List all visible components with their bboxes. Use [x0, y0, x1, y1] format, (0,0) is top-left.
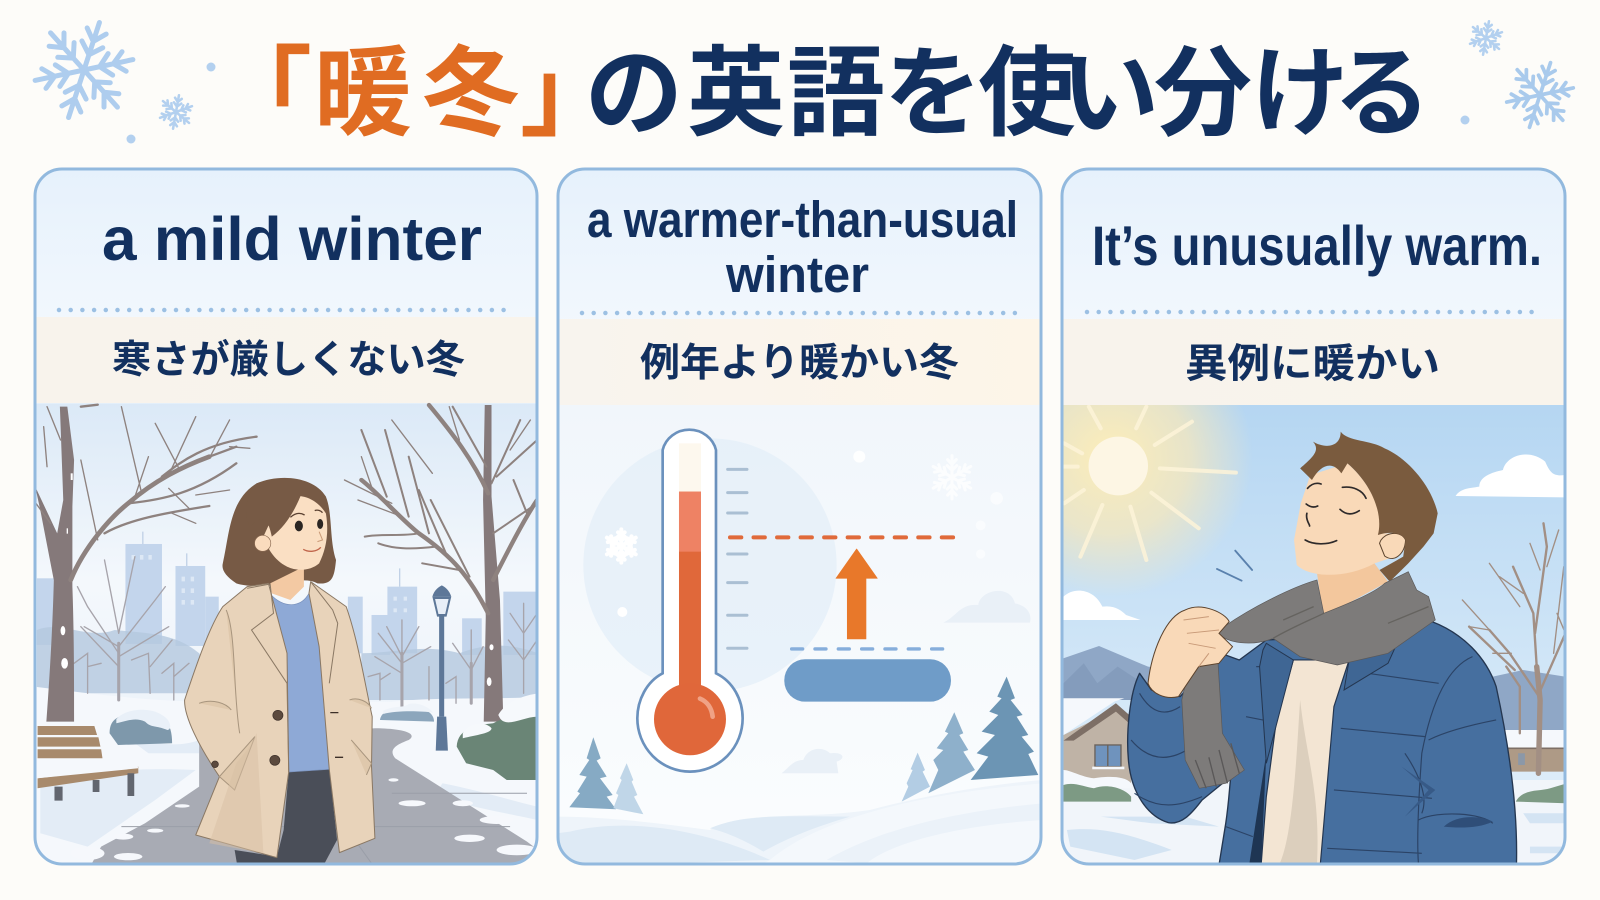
dotted divider 3 [1087, 310, 1541, 314]
thermometer bulb [654, 683, 726, 755]
meaning band 1 [36, 317, 536, 403]
back building [1505, 730, 1567, 772]
house [1064, 698, 1131, 788]
blue bar: usual level [784, 659, 951, 702]
orange up arrow [836, 549, 877, 639]
sun glow [969, 317, 1253, 597]
panel 2 border [558, 169, 1041, 864]
decoration: snowflakes right [1460, 18, 1582, 138]
illustration: thermometer [553, 405, 1047, 868]
street lamp [432, 585, 451, 751]
phrase: a warmer-than-usual winter: winter [725, 246, 869, 303]
fir trees [569, 677, 1038, 814]
hills [557, 780, 1043, 867]
large tree right [344, 405, 537, 722]
bare tree [1462, 523, 1565, 773]
ear [1380, 533, 1406, 558]
snow ground [1064, 780, 1567, 867]
meaning: 例年より暖かい冬: 例年より暖かい冬 [640, 342, 959, 385]
far treeline [37, 627, 538, 700]
decoration: snowflakes left [22, 7, 216, 143]
phrase: a warmer-than-usual winter: a warmer-than-usual [587, 191, 1018, 248]
face [1294, 463, 1395, 575]
thermometer mercury [679, 492, 701, 688]
panel: a mild winter [30, 169, 544, 870]
snow ground [34, 687, 541, 867]
hand [1148, 607, 1233, 698]
illustration: woman in snowy park [30, 403, 544, 870]
neck [1317, 563, 1388, 617]
sweater [270, 593, 329, 772]
trousers [235, 768, 337, 864]
scarf around neck [1219, 572, 1435, 665]
panel: It's unusually warm. [969, 169, 1571, 870]
hair back [222, 478, 336, 586]
meaning band 3 [1063, 319, 1564, 405]
phrase: a warmer-than-usual winter [587, 191, 1018, 303]
bushes [110, 693, 538, 780]
meaning: 寒さが厳しくない冬: 寒さが厳しくない冬 [112, 339, 465, 382]
blue dashed line: normal [790, 647, 944, 651]
background small trees [74, 557, 537, 707]
coat [185, 582, 375, 858]
panel: a warmer-than-usual winter [553, 169, 1047, 868]
thermometer pale top [679, 443, 701, 492]
snow specks on trunks [61, 473, 494, 686]
coat buttons [212, 710, 343, 768]
hanging scarf end [1182, 652, 1244, 788]
clouds [1456, 454, 1565, 497]
footpath [91, 728, 538, 865]
red dashed line: this winter [728, 535, 956, 540]
title: 「暖冬」の英語を使い分ける [214, 38, 1431, 148]
facial features [290, 510, 323, 551]
large tree left [34, 405, 257, 722]
hedges [1064, 784, 1131, 802]
dotted divider 2 [582, 311, 1018, 315]
faint clouds [782, 591, 1030, 773]
dotted divider 1 [59, 308, 514, 312]
face and neck [270, 567, 304, 600]
breeze marks [1217, 551, 1252, 581]
panel 1 header background [36, 170, 536, 317]
illustration: man enjoying sun [969, 317, 1571, 870]
phrase: a mild winter: a mild winter [102, 205, 482, 273]
panel 3 header background [1062, 169, 1565, 404]
inner shirt [1261, 660, 1349, 863]
background snow details [617, 451, 1003, 617]
thermometer glass [637, 430, 743, 772]
pale background circle [583, 438, 837, 692]
panel 2 header background [560, 170, 1040, 319]
thermometer [637, 430, 743, 772]
panel 1 border [35, 169, 537, 864]
fringe [256, 482, 326, 536]
meaning band 2 [559, 319, 1040, 405]
jacket collar [1260, 633, 1402, 763]
panel 3 border [1062, 169, 1565, 864]
man jacket [1128, 622, 1517, 865]
sun and rays [1064, 407, 1236, 560]
facial features [1305, 483, 1366, 544]
city skyline [37, 532, 539, 655]
bench [38, 722, 138, 801]
distant mountains [1064, 646, 1565, 733]
meaning: 異例に暖かい: 異例に暖かい [1185, 342, 1440, 386]
scale ticks [728, 469, 747, 648]
hair [1300, 432, 1438, 582]
